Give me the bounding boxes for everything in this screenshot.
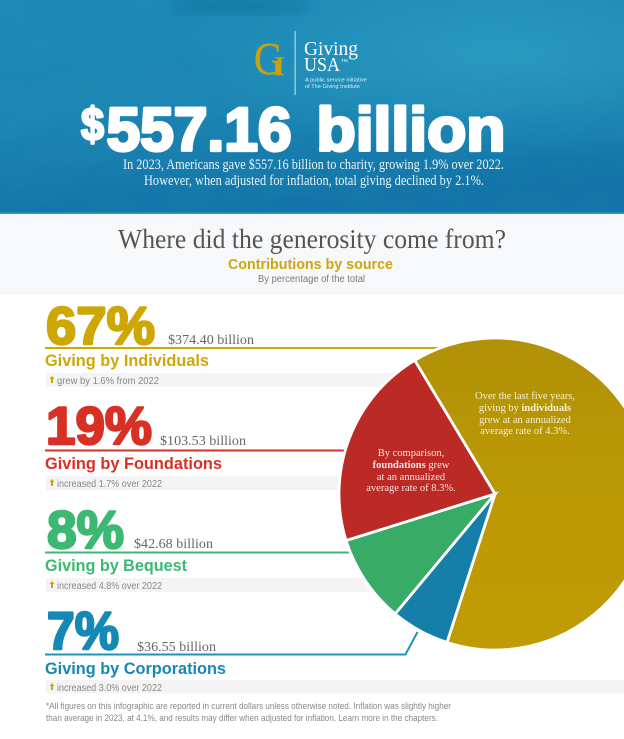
pie note: foundations: By comparison,	[378, 448, 444, 459]
pie note: foundations: average rate of 8.3%.	[366, 483, 456, 494]
percentage: 19%	[46, 397, 152, 456]
growth note: increased 1.7% over 2022	[57, 479, 162, 490]
slice: individuals	[415, 338, 624, 650]
logo wordmark: Giving	[304, 38, 358, 60]
category name: Giving by Individuals	[45, 351, 209, 370]
subheading: Contributions by source	[228, 257, 393, 273]
header summary text: In 2023, Americans gave $557.16 billion to charity, growing 1.9% over 2022.	[123, 157, 504, 173]
slice: foundations	[339, 360, 495, 541]
arrow icon	[50, 581, 54, 588]
pie note: individuals: Over the last five years,	[475, 391, 575, 402]
amount: $42.68 billion	[134, 537, 213, 552]
header summary text	[123, 157, 504, 189]
percentage: 67%	[46, 297, 155, 356]
headline: total giving: 557.16	[106, 96, 292, 164]
panel: header banner	[0, 0, 624, 214]
growth note: grew by 1.6% from 2022	[57, 376, 159, 387]
slice: bequest	[346, 494, 495, 614]
logo wordmark: USA	[304, 54, 340, 76]
pie note: individuals: average rate of 4.3%.	[480, 426, 570, 437]
footnote: *All figures on this infographic are reported in current dollars unless otherwise noted. Inflation was slightly higher	[46, 701, 451, 712]
percentage: 8%	[47, 501, 124, 560]
category name: Giving by Foundations	[45, 454, 222, 473]
arrow icon	[50, 683, 54, 690]
growth note: increased 3.0% over 2022	[57, 683, 162, 694]
amount: $103.53 billion	[160, 434, 246, 449]
arrow icon	[50, 376, 54, 383]
footnote: than average in 2023, at 4.1%, and results may differ when adjusted for inflation. Learn more in the chapters.	[46, 713, 438, 724]
panel: corporations	[45, 602, 624, 694]
pie note: individuals: grew at an annualized	[479, 415, 572, 426]
logo wordmark: TM	[341, 58, 348, 63]
pie note: foundations: foundations grew	[373, 460, 450, 471]
logo mark: I	[274, 52, 285, 81]
slice: corporations	[395, 494, 495, 642]
headline: total giving	[81, 96, 506, 164]
header summary text: However, when adjusted for inflation, total giving declined by 2.1%.	[144, 173, 484, 189]
panel: section heading	[0, 214, 624, 295]
heading: Where did the generosity come from?	[118, 224, 506, 254]
category name: Giving by Bequest	[45, 556, 187, 575]
logo wordmark	[304, 38, 358, 76]
pie chart	[339, 338, 624, 650]
logo mark: G	[254, 33, 283, 84]
category name: Giving by Corporations	[45, 659, 226, 678]
pie note: foundations	[366, 448, 456, 494]
panel: bequest	[45, 501, 369, 592]
amount: $374.40 billion	[168, 333, 254, 348]
logo tagline: A public service initiative	[305, 78, 367, 84]
amount: $36.55 billion	[137, 640, 216, 655]
growth note: increased 4.8% over 2022	[57, 581, 162, 592]
subheading note: By percentage of the total	[258, 274, 365, 285]
arrow icon	[50, 479, 54, 486]
panel: individuals	[45, 297, 438, 387]
logo: Giving USA	[254, 31, 367, 95]
panel: foundations	[45, 397, 344, 490]
headline: total giving: billion	[316, 96, 506, 164]
logo tagline: of The Giving Institute	[305, 84, 360, 90]
pie note: individuals: giving by individuals	[479, 403, 571, 414]
pie note: individuals	[475, 391, 575, 437]
headline: total giving: $	[81, 98, 104, 150]
percentage: 7%	[47, 602, 119, 661]
logo tagline	[305, 78, 367, 90]
footnote	[46, 701, 451, 724]
pie note: foundations: at an annualized	[377, 472, 446, 483]
